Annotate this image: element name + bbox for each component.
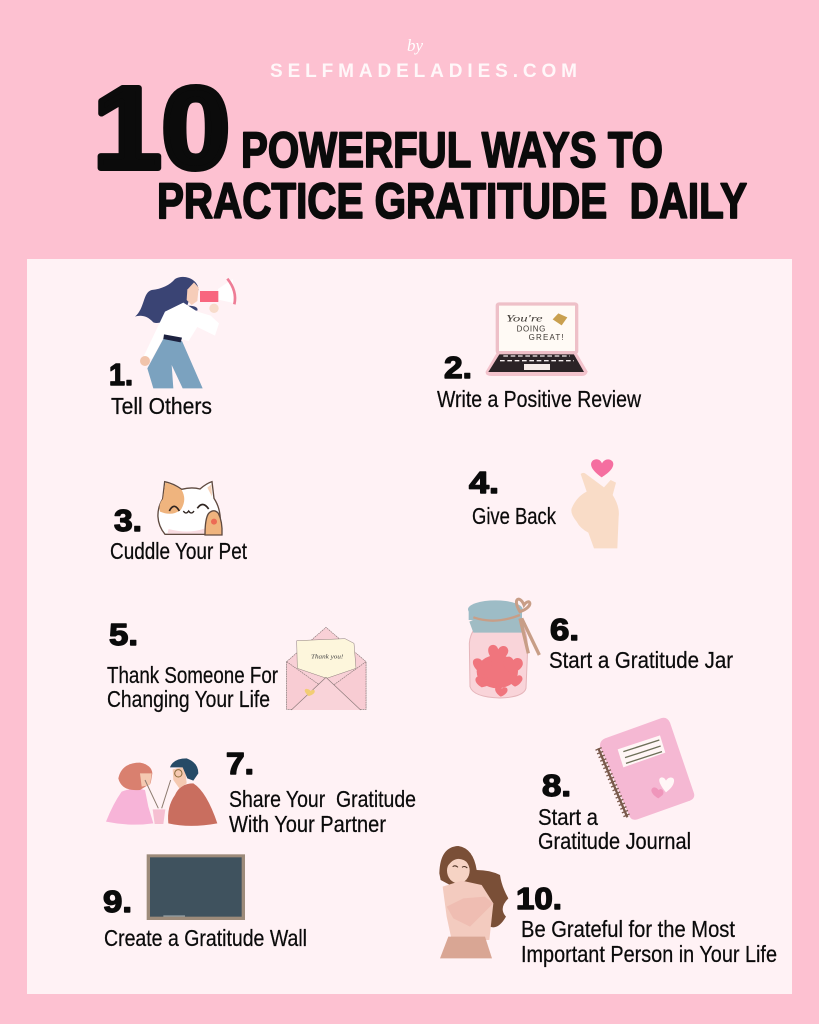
icon: cat xyxy=(158,482,222,535)
icon: laptop xyxy=(486,304,588,376)
label 5: Changing Your Life xyxy=(107,686,270,712)
icon: laptop: DOING xyxy=(517,324,545,333)
item 1: tell others xyxy=(109,277,235,419)
number 3: 3. xyxy=(114,503,142,538)
icon: jar of hearts xyxy=(468,599,539,698)
label 8: Gratitude Journal xyxy=(538,828,691,854)
item 6: gratitude jar xyxy=(468,599,733,698)
number 9: 9. xyxy=(103,884,132,919)
item 4: give back xyxy=(469,459,619,548)
label 10: Important Person in Your Life xyxy=(521,941,777,967)
label 5 xyxy=(107,662,278,712)
byline xyxy=(270,36,577,82)
item 7: share with partner xyxy=(106,746,416,837)
title line 1: POWERFUL WAYS TO xyxy=(241,122,663,178)
number 2: 2. xyxy=(444,350,472,385)
icon: spiral notebook xyxy=(598,718,694,820)
byline: by xyxy=(407,36,423,55)
label 5: Thank Someone For xyxy=(107,662,278,688)
label 7 xyxy=(229,786,416,837)
label 8: Start a xyxy=(538,804,598,830)
number 7: 7. xyxy=(226,746,254,781)
panel: list of ways xyxy=(27,259,792,994)
label 10: Be Grateful for the Most xyxy=(521,916,736,942)
title xyxy=(93,63,747,229)
icon: finger heart hand xyxy=(571,459,619,548)
label 4: Give Back xyxy=(472,503,556,529)
item 5: thank someone xyxy=(107,617,366,712)
title number 10: 10 xyxy=(93,63,230,193)
icon: woman hugging herself xyxy=(439,846,508,958)
number 10: 10. xyxy=(516,881,562,916)
icon: laptop: GREAT! xyxy=(529,333,564,342)
number 6: 6. xyxy=(550,612,579,647)
icon: chalkboard xyxy=(147,854,245,920)
byline: SELFMADELADIES.COM xyxy=(270,61,577,82)
label 3: Cuddle Your Pet xyxy=(110,538,247,564)
number 4: 4. xyxy=(469,465,499,500)
label 1: Tell Others xyxy=(111,393,212,419)
icon: couple sharing a drink xyxy=(106,758,217,826)
icon: woman with megaphone xyxy=(135,277,235,388)
label 9: Create a Gratitude Wall xyxy=(104,925,307,951)
number 1: 1. xyxy=(109,357,133,392)
label 10 xyxy=(521,916,777,967)
item 2: write a positive review xyxy=(437,304,641,412)
label 8 xyxy=(538,804,691,854)
icon: envelope: Thank you! xyxy=(311,655,343,661)
label 2: Write a Positive Review xyxy=(437,386,641,412)
icon: laptop: You're xyxy=(506,314,543,324)
label 7: Share Your Gratitude xyxy=(229,786,416,812)
icon: envelope xyxy=(287,627,366,710)
number 5: 5. xyxy=(109,617,138,652)
item 9: gratitude wall xyxy=(103,854,307,951)
item 10: most important person xyxy=(439,846,777,967)
number 8: 8. xyxy=(542,768,571,803)
label 7: With Your Partner xyxy=(229,811,386,837)
item 3: cuddle your pet xyxy=(110,482,247,564)
item 8: gratitude journal xyxy=(538,718,694,854)
label 6: Start a Gratitude Jar xyxy=(549,647,733,673)
